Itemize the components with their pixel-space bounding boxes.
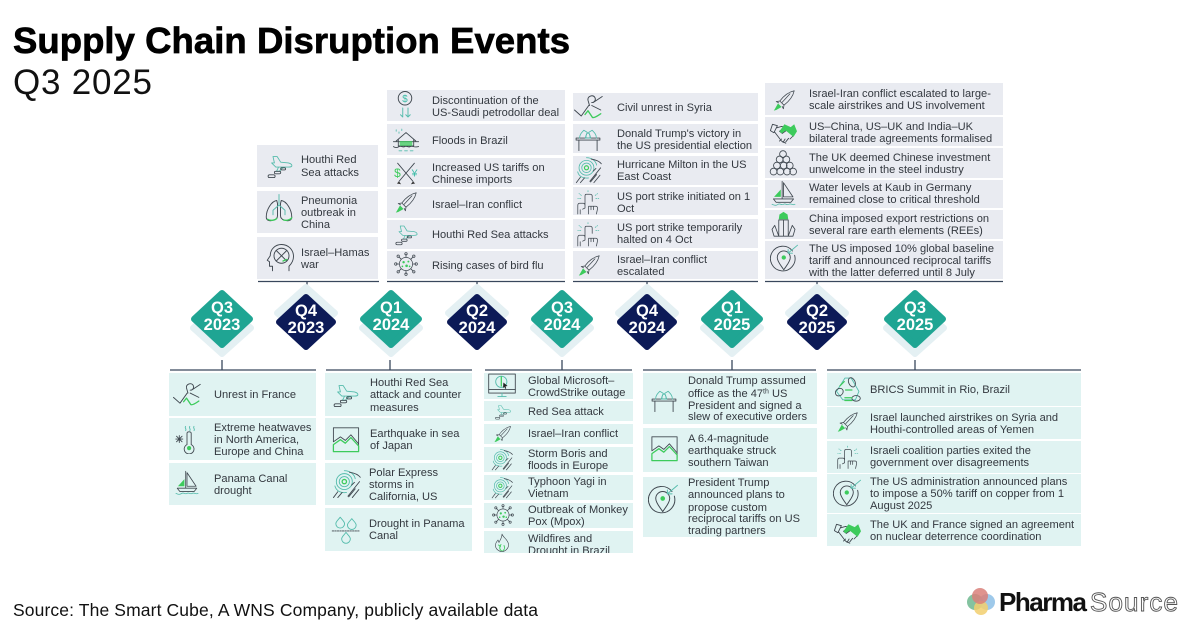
diamond: Q1 2025: Q1 <box>721 299 743 317</box>
event: Taiwan earthquake: earthquake struck <box>688 445 777 457</box>
event: copper tariff <box>827 474 1081 513</box>
diamond: Q2 2024: Q2 <box>466 302 488 320</box>
event: airstrikes <box>765 83 1003 115</box>
event: CrowdStrike outage: Global Microsoft– <box>528 375 615 387</box>
event: trade agreements <box>765 117 1003 146</box>
event: Storm Boris <box>484 447 633 472</box>
diamond: Q3 2023: Q3 <box>211 299 233 317</box>
event: Extreme heatwaves: Extreme heatwaves <box>214 422 312 434</box>
event: global baseline tariff: with the latter deferred until 8 July <box>808 267 975 279</box>
event: port strike initiated: Oct <box>617 203 634 215</box>
event: Hurricane Milton <box>573 156 758 185</box>
event: Houthi Red Sea attacks: Houthi Red Sea attacks <box>432 229 549 241</box>
diamond: Q2 2025 <box>788 287 846 347</box>
event: Chinese steel investment <box>765 148 1003 178</box>
event: Red Sea attack: Red Sea attack <box>528 406 604 418</box>
event: Floods in Brazil <box>387 124 565 155</box>
event: Pneumonia outbreak: Pneumonia <box>301 195 358 207</box>
event: Houthi attack <box>325 373 472 416</box>
event: Hurricane Milton: East Coast <box>617 171 671 183</box>
event: Panama Canal drought <box>169 463 316 505</box>
diamond: Q3 2024 <box>533 293 591 354</box>
event: reciprocal tariffs: reciprocal tariffs on US <box>688 513 800 525</box>
panel: Q2 2025 events <box>765 83 1003 279</box>
diamond: Q4 2024 <box>618 287 676 347</box>
event: Monkey Pox <box>484 503 633 528</box>
subtitle: Q3 2025 <box>13 63 152 102</box>
diamond: Q4 2023: 2023 <box>288 319 324 337</box>
event: Extreme heatwaves <box>169 418 316 460</box>
panel: Q1 2025 events <box>643 373 817 537</box>
event: Unrest in France <box>169 373 316 416</box>
panel: Q4 2023 events <box>257 145 378 279</box>
panel: Q1 2024 events <box>325 373 472 551</box>
event: US tariffs: Increased US tariffs on <box>432 162 545 174</box>
event: reciprocal tariffs: propose custom <box>688 502 767 514</box>
logo: PharmaSource <box>967 587 1178 617</box>
diamond: Q3 2025: Q3 <box>904 299 926 317</box>
diamond: Q2 2025: Q2 <box>806 302 828 320</box>
event: Trump assumed office: office as the 47 <box>688 388 787 400</box>
event: Earthquake Japan: of Japan <box>370 440 413 452</box>
event: Trump assumed office: US <box>769 388 787 400</box>
event: Syria and Yemen airstrikes <box>827 407 1081 439</box>
event: rare earth restrictions <box>765 210 1003 239</box>
event: Israel-Hamas war <box>257 237 378 279</box>
event: nuclear deterrence: on nuclear deterrence coordination <box>870 531 1041 543</box>
logo: PharmaSource: Source <box>1090 587 1178 617</box>
event: CrowdStrike outage: CrowdStrike outage <box>528 387 625 399</box>
event: coalition parties: government over disagreements <box>870 457 1030 469</box>
event: Panama Canal drought: Panama Canal <box>214 473 287 485</box>
event: Polar Express storms: Polar Express <box>369 467 439 479</box>
diamond: Q3 2024: 2024 <box>544 316 581 334</box>
event: Israel-Iran conflict <box>387 189 565 218</box>
diamond: Q4 2024: Q4 <box>636 302 659 320</box>
event: Houthi Red Sea attacks: Houthi Red <box>301 154 357 166</box>
diamond: Q3 2025: 2025 <box>897 316 933 334</box>
event: reciprocal tariffs: President Trump <box>688 477 769 489</box>
event: port strike halted: US port strike temporarily <box>617 222 743 234</box>
event: airstrikes: scale airstrikes and US involvement <box>809 100 985 112</box>
event: global baseline tariff <box>765 241 1003 279</box>
event: nuclear deterrence <box>827 514 1081 546</box>
event: petrodollar deal: Discontinuation of the <box>432 95 539 107</box>
event: coalition parties: Israeli coalition parties exited the <box>870 445 1031 457</box>
event: Israel-Iran <box>484 424 633 444</box>
diamond: Q3 2023 <box>193 293 251 354</box>
event: bird flu: Rising cases of bird flu <box>432 260 544 272</box>
diamond: Q3 2025 <box>886 293 944 354</box>
event: reciprocal tariffs <box>643 477 817 537</box>
source note: Source: The Smart Cube, A WNS Company, publicly available data <box>13 600 538 620</box>
event: port strike halted: halted on 4 Oct <box>617 234 692 246</box>
event: Drought Panama: Drought in Panama <box>369 518 465 530</box>
event: Civil unrest in Syria: Civil unrest in Syria <box>617 102 713 114</box>
event: Typhoon Yagi: Vietnam <box>528 488 568 500</box>
diamond: Q4 2023: Q4 <box>295 302 318 320</box>
panel: Q3 2024 events <box>484 373 633 557</box>
event: Unrest in France: Unrest in France <box>214 389 296 401</box>
event: Drought Panama <box>325 508 472 551</box>
event: Trump assumed office: slew of executive orders <box>688 411 807 423</box>
event: CrowdStrike outage <box>484 373 633 399</box>
event: Trump assumed office: President and signed a <box>688 400 802 412</box>
event: rare earth restrictions: several rare earth elements (REEs) <box>809 225 983 237</box>
event: trade agreements: US–China, US–UK and India–UK <box>809 121 974 133</box>
event: Trump assumed office <box>643 373 817 424</box>
diamond: Q1 2024: Q1 <box>380 299 402 317</box>
event: conflict escalated: Israel–Iran conflict <box>617 254 707 266</box>
event: petrodollar deal <box>387 90 565 121</box>
event: Houthi attack: attack and counter <box>370 389 462 401</box>
event: Houthi attack: Houthi Red Sea <box>370 377 449 389</box>
event: Extreme heatwaves: Europe and China <box>214 446 304 458</box>
event: Drought Panama: Canal <box>369 530 398 542</box>
event: Earthquake Japan: Earthquake in sea <box>370 428 460 440</box>
event: Extreme heatwaves: in North America, <box>214 434 299 446</box>
event: conflict escalated <box>573 251 758 279</box>
event: global baseline tariff: tariff and announced reciprocal tariffs <box>809 255 992 267</box>
event: Typhoon Yagi <box>484 475 633 500</box>
panel: Q2 2024 events <box>387 90 565 279</box>
event: Israel-Hamas war: war <box>300 259 319 271</box>
event: Monkey Pox: Pox (Mpox) <box>528 516 585 528</box>
event: Typhoon Yagi: Typhoon Yagi in <box>528 476 607 488</box>
event: Red Sea attack <box>484 401 633 421</box>
event: Polar Express storms: California, US <box>369 491 437 503</box>
event: conflict escalated: escalated <box>617 266 664 278</box>
diamond: Q2 2024: 2024 <box>459 319 496 337</box>
event: Earthquake Japan <box>325 418 472 460</box>
event: Storm Boris: Storm Boris and <box>528 448 608 460</box>
event: Monkey Pox: Outbreak of Monkey <box>528 504 628 516</box>
event: Chinese steel investment: The UK deemed Chinese investment <box>809 152 990 164</box>
event: Israel-Hamas war: Israel–Hamas <box>301 247 370 259</box>
event: US tariffs <box>387 158 565 187</box>
event: Civil unrest in Syria <box>573 93 758 121</box>
event: BRICS Summit <box>827 373 1081 406</box>
event: Wildfires: Wildfires and <box>528 533 592 545</box>
event: port strike initiated <box>573 187 758 215</box>
event: Polar Express storms: storms in <box>369 479 414 491</box>
event: Taiwan earthquake: A 6.4-magnitude <box>688 433 769 445</box>
event: bird flu <box>387 251 565 279</box>
event: rare earth restrictions: China imposed export restrictions on <box>809 213 989 225</box>
diamond: Q4 2024: 2024 <box>629 319 666 337</box>
event: Syria and Yemen airstrikes: Houthi-controlled areas of Yemen <box>870 424 1034 436</box>
event: copper tariff: August 2025 <box>870 500 932 512</box>
event: Polar Express storms <box>325 463 472 505</box>
diamond: Q4 2023 <box>277 287 335 347</box>
event: Israel-Iran conflict: Israel–Iran conflict <box>432 199 522 211</box>
event: Trump assumed office: Donald Trump assumed <box>688 375 806 387</box>
event: Pneumonia outbreak <box>257 191 378 233</box>
event: copper tariff: to impose a 50% tariff on copper from 1 <box>870 488 1064 500</box>
diamond: Q1 2025 <box>703 293 761 354</box>
event: petrodollar deal: US-Saudi petrodollar deal <box>432 107 559 119</box>
event: Trump assumed office: th <box>763 388 769 396</box>
event: Kaub water levels: Water levels at Kaub in Germany <box>809 182 972 194</box>
diamond: Q3 2023: 2023 <box>204 316 240 334</box>
event: Floods in Brazil: Floods in Brazil <box>432 135 508 147</box>
event: Pneumonia outbreak: China <box>301 219 331 231</box>
event: Trump victory: Donald Trump's victory in <box>617 128 741 140</box>
event: Taiwan earthquake: southern Taiwan <box>688 457 769 469</box>
diamond: Q3 2024: Q3 <box>551 299 573 317</box>
panel: Q4 2024 events <box>573 93 758 279</box>
event: reciprocal tariffs: announced plans to <box>688 489 785 501</box>
title: Supply Chain Disruption Events <box>13 20 570 61</box>
event: Pneumonia outbreak: outbreak in <box>301 207 356 219</box>
event: global baseline tariff: The US imposed 10% global baseline <box>809 243 994 255</box>
panel: Q3 2023 events <box>169 373 316 505</box>
event: Trump victory: the US presidential election <box>617 140 752 152</box>
event: Hurricane Milton: Hurricane Milton in the US <box>617 159 746 171</box>
logo: PharmaSource: Pharma <box>999 587 1088 617</box>
event: Houthi Red Sea attacks <box>387 220 565 249</box>
diamond: Q2 2025: 2025 <box>799 319 835 337</box>
event: trade agreements: bilateral trade agreements formalised <box>809 133 992 145</box>
event: reciprocal tariffs: trading partners <box>688 525 766 537</box>
diamond: Q1 2024: 2024 <box>373 316 410 334</box>
event: Taiwan earthquake <box>643 428 817 472</box>
timeline connectors <box>170 282 1081 370</box>
event: nuclear deterrence: The UK and France signed an agreement <box>870 519 1074 531</box>
diamond: Q2 2024 <box>448 287 506 347</box>
event: Wildfires <box>484 531 633 557</box>
event: Panama Canal drought: drought <box>214 485 252 497</box>
event: Houthi Red Sea attacks <box>257 145 378 187</box>
event: Syria and Yemen airstrikes: Israel launched airstrikes on Syria and <box>870 412 1058 424</box>
event: airstrikes: Israel-Iran conflict escalated to large- <box>809 88 991 100</box>
event: Israel-Iran: Israel–Iran conflict <box>528 428 618 440</box>
event: Kaub water levels <box>765 180 1003 208</box>
panel: Q3 2025 events <box>827 373 1081 546</box>
event: Trump victory <box>573 124 758 153</box>
event: copper tariff: The US administration announced plans <box>870 476 1068 488</box>
event: Wildfires: Drought in Brazil <box>528 545 610 557</box>
event: Storm Boris: floods in Europe <box>528 460 608 472</box>
event: port strike initiated: US port strike initiated on 1 <box>617 191 750 203</box>
diamond: Q1 2024 <box>362 293 420 354</box>
event: coalition parties <box>827 441 1081 473</box>
event: Houthi Red Sea attacks: Sea attacks <box>301 167 359 179</box>
event: Chinese steel investment: unwelcome in the steel industry <box>809 164 964 176</box>
event: port strike halted <box>573 219 758 248</box>
diamond: Q1 2025: 2025 <box>714 316 750 334</box>
event: Kaub water levels: remained close to critical threshold <box>809 194 980 206</box>
event: Houthi attack: measures <box>370 402 419 414</box>
event: US tariffs: Chinese imports <box>432 174 513 186</box>
event: BRICS Summit: BRICS Summit in Rio, Brazil <box>870 384 1010 396</box>
